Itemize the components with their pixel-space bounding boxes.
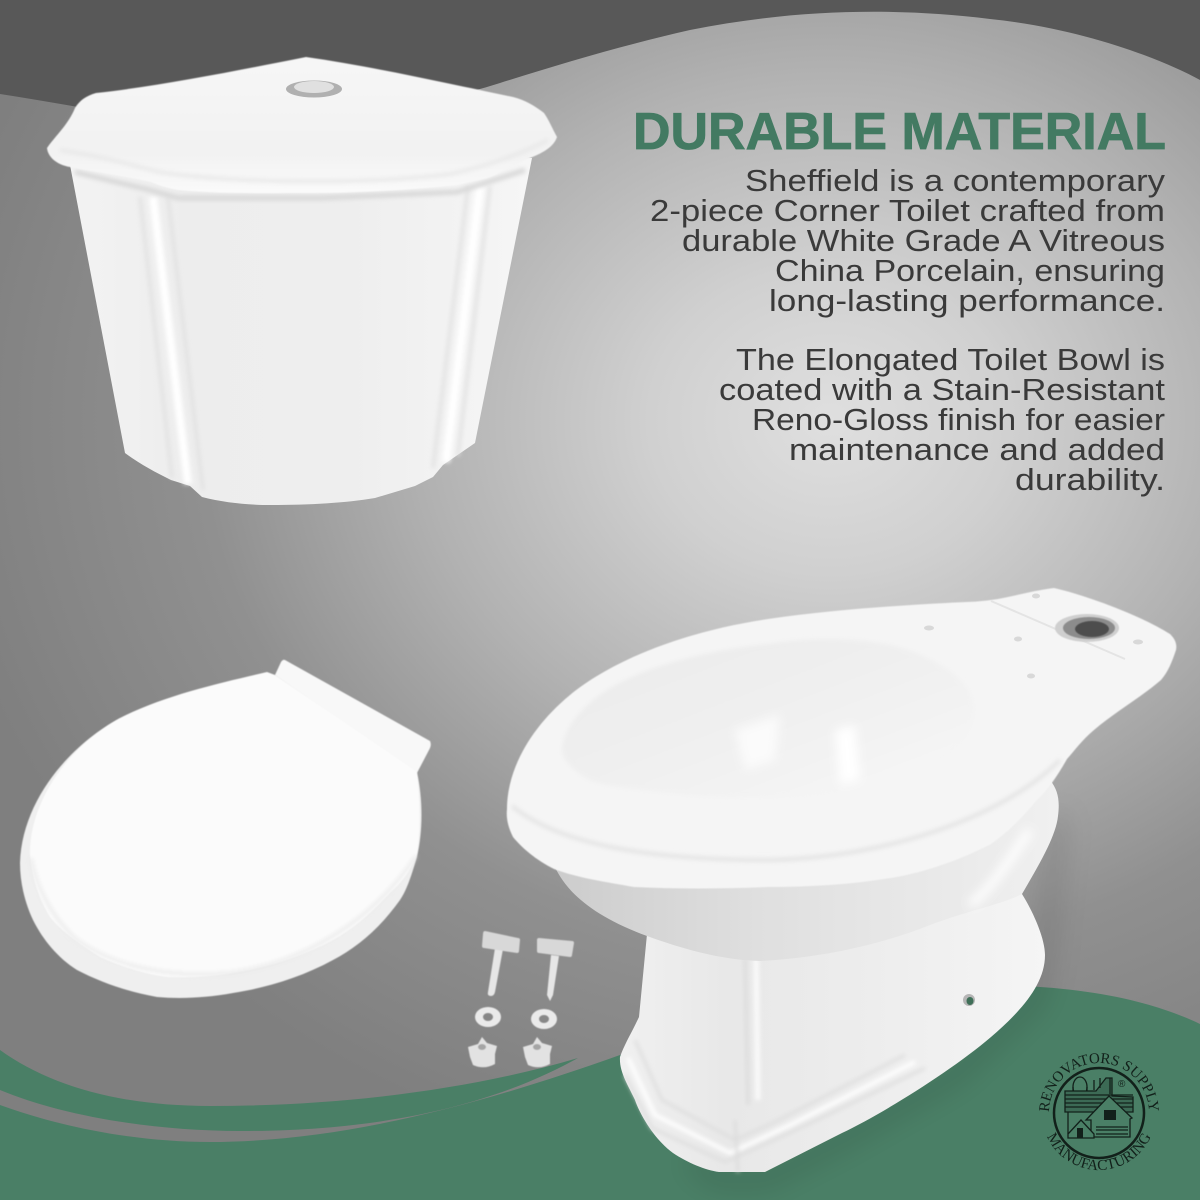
logo text top: RENOVATORS SUPPLY xyxy=(1039,1053,1159,1112)
bolt hole xyxy=(963,994,975,1006)
nut right xyxy=(523,1037,552,1067)
bowl underside xyxy=(554,780,1059,961)
bottom green wave xyxy=(0,985,1200,1200)
bolt left xyxy=(482,931,520,996)
mounting holes xyxy=(924,594,1143,678)
text block: second paragraph: maintenance and added xyxy=(789,432,1165,467)
text block: first paragraph: China Porcelain, ensuring xyxy=(775,253,1165,288)
registered mark: ® xyxy=(1118,1079,1126,1090)
text block: second paragraph xyxy=(719,342,1165,497)
seat hinge tab xyxy=(275,660,431,773)
seat lid xyxy=(30,672,420,977)
bowl rim and tank deck xyxy=(507,588,1176,888)
pedestal xyxy=(620,880,1045,1172)
pedestal edges and base ridges xyxy=(625,958,925,1172)
text block: second paragraph: durability. xyxy=(1015,462,1165,497)
text block: first paragraph xyxy=(650,163,1166,318)
soft shadow xyxy=(690,816,1058,1180)
hardware: seat bolts, washers, nuts xyxy=(468,931,574,1067)
toilet seat xyxy=(20,660,431,998)
top dark wave xyxy=(0,0,1200,125)
toilet tank xyxy=(47,57,557,505)
text block: second paragraph: Reno-Gloss finish for easier xyxy=(752,402,1165,437)
text block: first paragraph: long-lasting performance. xyxy=(769,283,1165,318)
text block: first paragraph: durable White Grade A Vitreous xyxy=(682,223,1165,258)
text block: second paragraph: coated with a Stain-Resistant xyxy=(719,372,1165,407)
washer right xyxy=(531,1009,557,1029)
basin xyxy=(562,639,974,798)
logo: Renovators Supply Manufacturing xyxy=(1039,1053,1159,1170)
text block: first paragraph: 2-piece Corner Toilet crafted from xyxy=(650,193,1165,228)
house illustration xyxy=(1065,1077,1133,1138)
flush button xyxy=(286,80,342,98)
text block: second paragraph: The Elongated Toilet Bowl is xyxy=(736,342,1165,377)
water inlet hole xyxy=(1055,614,1119,642)
toilet bowl xyxy=(507,588,1176,1180)
tank lid xyxy=(47,57,557,193)
shadow under tank lid xyxy=(75,170,525,198)
text block: first paragraph: Sheffield is a contemporary xyxy=(745,163,1166,198)
heading: DURABLE MATERIAL xyxy=(633,103,1166,161)
rim lip shading xyxy=(512,760,1060,860)
deck seam xyxy=(991,601,1125,659)
seat lower ring xyxy=(20,718,422,998)
logo text bottom: MANUFACTURING xyxy=(1046,1132,1150,1170)
bolt right xyxy=(537,938,574,1001)
nut left xyxy=(468,1037,497,1067)
tank body xyxy=(70,158,532,505)
logo ring xyxy=(1054,1068,1144,1158)
washer left xyxy=(475,1007,501,1027)
